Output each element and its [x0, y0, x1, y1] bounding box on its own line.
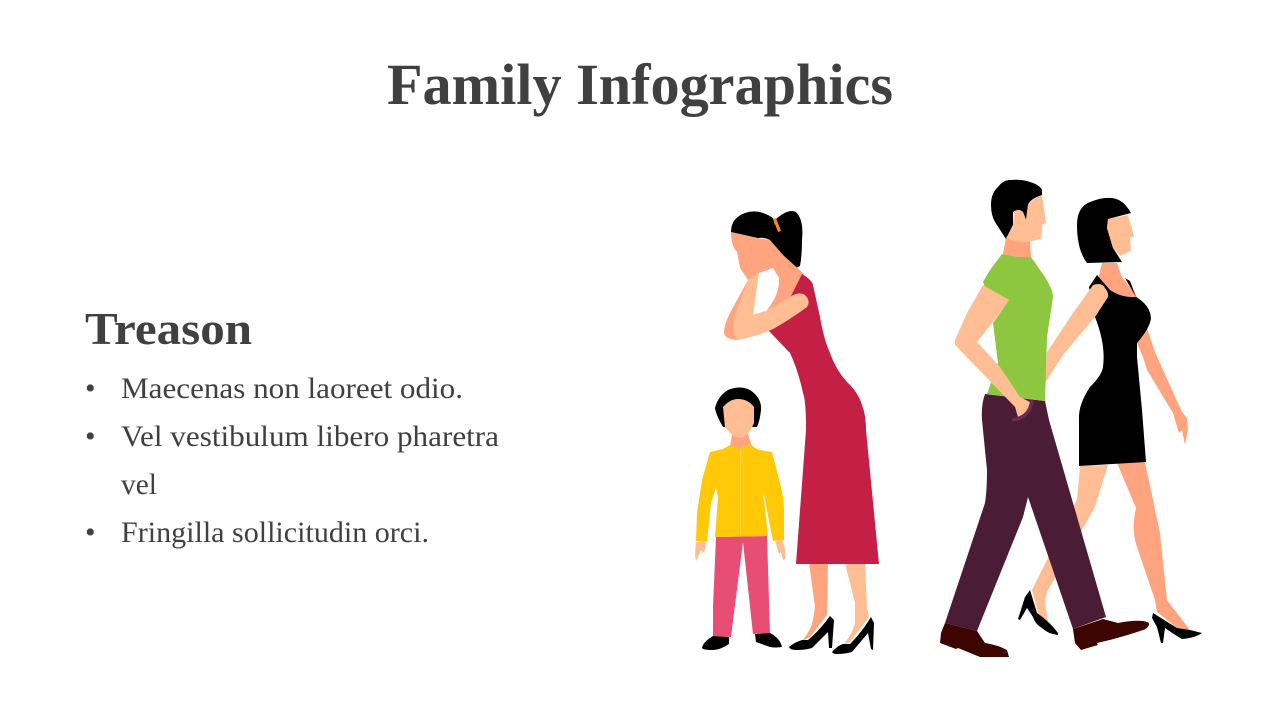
- bullet 2: [85, 420, 499, 501]
- bullet 2: •: [85, 420, 96, 453]
- figure: leaning woman: [724, 211, 879, 654]
- bullet list: [85, 372, 499, 549]
- bullet 3: •: [85, 516, 96, 549]
- bullet 3: Fringilla sollicitudin orci.: [121, 516, 429, 549]
- bullet 2: Vel vestibulum libero pharetra: [121, 420, 499, 453]
- bullet 1: Maecenas non laoreet odio.: [121, 372, 463, 405]
- figure: man in green shirt: [940, 180, 1149, 657]
- bullet 2: vel: [121, 468, 157, 501]
- heading: Treason: Treason: [85, 303, 252, 354]
- pocket: [1012, 400, 1032, 420]
- bullet 1: •: [85, 372, 96, 405]
- title: Family Infographics: [387, 52, 893, 117]
- figure: woman in black dress: [1018, 198, 1202, 643]
- figure: child: [695, 388, 785, 650]
